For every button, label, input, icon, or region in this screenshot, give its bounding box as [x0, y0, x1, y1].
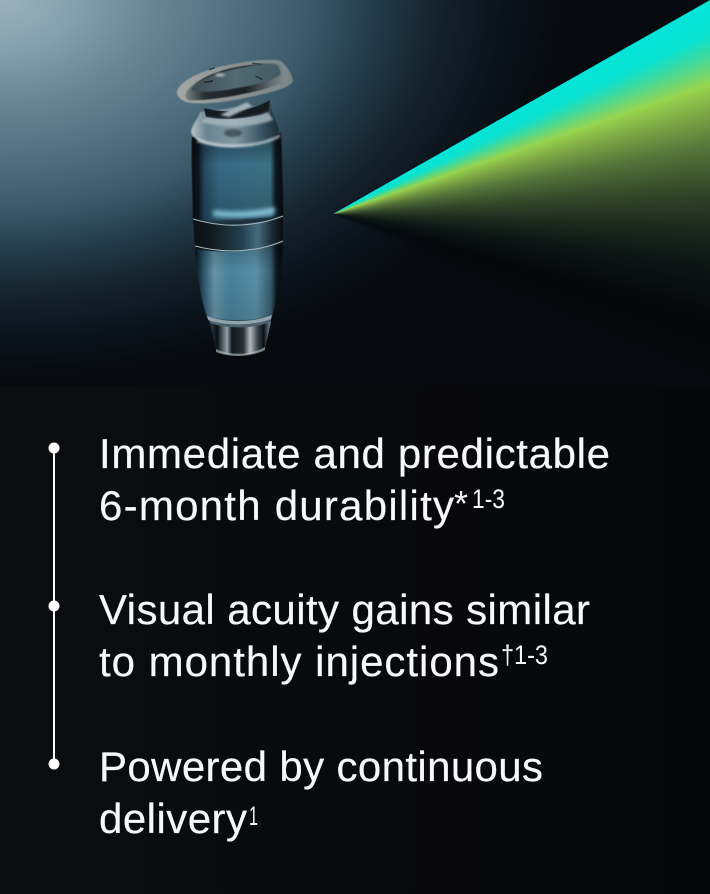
device lower chamber [195, 244, 283, 321]
timeline vertical line [53, 448, 55, 764]
timeline [48, 442, 60, 770]
timeline marker 2 [48, 600, 60, 612]
text block: durability: * [454, 483, 468, 524]
device shoulder [191, 103, 279, 147]
text block: durability: 1-3 [472, 484, 505, 514]
text block: durability: Immediate and predictable [99, 430, 610, 477]
text block: visual acuity: to monthly injections [99, 638, 499, 685]
text block: visual acuity: †1-3 [501, 640, 548, 670]
chamber highlight [213, 207, 275, 217]
text block: durability [99, 430, 610, 529]
text block: visual acuity [99, 586, 590, 685]
device upper chamber [192, 133, 283, 222]
text block: continuous delivery: delivery [99, 795, 247, 842]
device top plate [177, 60, 293, 103]
text block: continuous delivery: Powered by continuous [99, 743, 543, 790]
device nozzle [210, 322, 271, 355]
device middle band [193, 216, 283, 252]
device base collar [207, 315, 272, 329]
timeline marker 3 [48, 758, 60, 770]
text block: visual acuity: Visual acuity gains similar [99, 586, 590, 633]
timeline marker 1 [48, 442, 60, 454]
text block: durability: 6-month durability [99, 482, 454, 529]
panel: hero gradient background [0, 0, 710, 386]
light beam [334, 0, 710, 282]
icon: implant device [177, 60, 293, 356]
text block: continuous delivery: 1 [249, 801, 258, 831]
text block: continuous delivery [99, 743, 543, 842]
